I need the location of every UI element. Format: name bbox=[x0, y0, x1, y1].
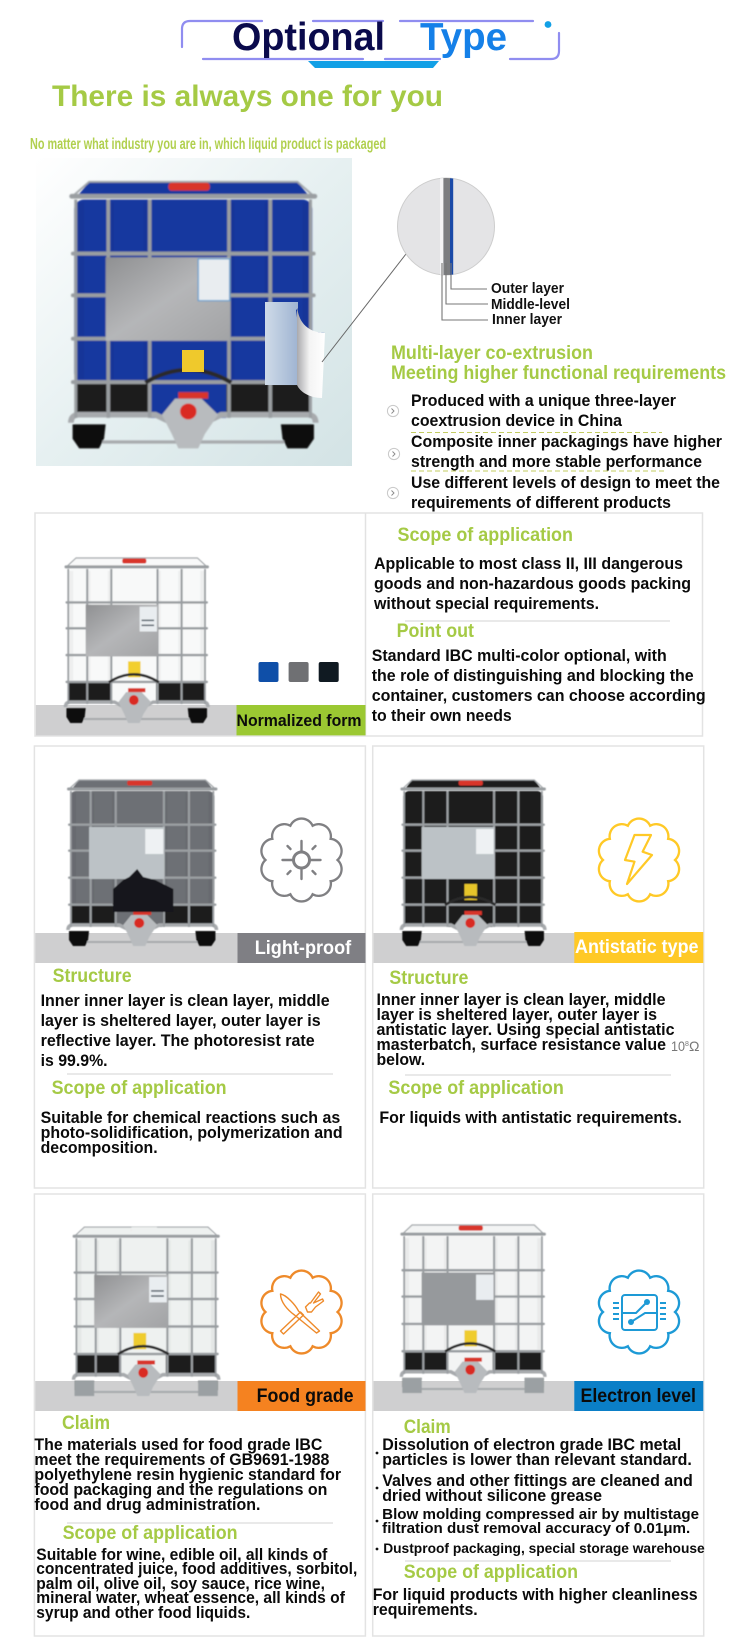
diagram: layer cross-section: Middle-level bbox=[491, 297, 570, 313]
colour swatches bbox=[258, 662, 339, 682]
title: Type bbox=[420, 16, 507, 59]
text: structure: layer is sheltered layer, outer layer is bbox=[41, 1012, 321, 1030]
product: electron grade IBC bbox=[400, 1225, 546, 1393]
text: scope of application bbox=[373, 525, 691, 613]
heading: multi-layer: Meeting higher functional requirements bbox=[391, 363, 726, 384]
title: Optional bbox=[232, 16, 385, 59]
text: claim list: particles is lower than relevant standard. bbox=[382, 1451, 692, 1469]
feature list: Use different levels of design to meet the bbox=[411, 474, 720, 492]
panel: normalized form bbox=[35, 513, 706, 736]
text: structure: antistatic layer. Using special antistatic bbox=[376, 1021, 674, 1039]
text: claim list: filtration dust removal accuracy of 0.01μm. bbox=[382, 1520, 690, 1537]
text: scope of application: Suitable for wine, edible oil, all kinds of bbox=[36, 1546, 328, 1564]
text: scope of application: mineral water, wheat essence, all kinds of bbox=[36, 1589, 345, 1607]
photo: blue IBC with peeled liner bbox=[36, 158, 406, 466]
feature list bbox=[387, 392, 723, 512]
text: claim: polyethylene resin hygienic standard for bbox=[34, 1466, 342, 1484]
label: food grade bbox=[238, 1381, 366, 1411]
text: point out: Point out bbox=[397, 621, 475, 642]
text: scope of application: Suitable for chemical reactions such as bbox=[41, 1109, 340, 1127]
subtitle: There is always one for you bbox=[52, 80, 443, 113]
feature list: Composite inner packagings have higher bbox=[411, 433, 723, 451]
text: structure: is 99.9%. bbox=[41, 1052, 108, 1070]
feature list: strength and more stable performance bbox=[411, 453, 702, 471]
text: scope of application: syrup and other food liquids. bbox=[36, 1604, 250, 1622]
intro line: No matter what industry you are in, which liquid product is packaged bbox=[30, 136, 386, 153]
text: scope of application bbox=[379, 1078, 682, 1127]
text: structure: Inner inner layer is clean layer, middle bbox=[41, 992, 330, 1010]
text: scope of application: photo-solidification, polymerization and bbox=[41, 1124, 343, 1142]
text: claim list: dried without silicone grease bbox=[382, 1487, 602, 1505]
heading: multi-layer: Multi-layer co-extrusion bbox=[391, 343, 593, 364]
text: scope of application: Applicable to most class II, III dangerous bbox=[374, 555, 683, 573]
label: antistatic type: Antistatic type bbox=[575, 937, 698, 958]
text: scope of application: Scope of application bbox=[398, 525, 573, 546]
product: grey IBC bbox=[67, 780, 217, 946]
label: light-proof bbox=[238, 933, 366, 963]
label: electron level bbox=[574, 1381, 703, 1411]
label: normalized form bbox=[236, 705, 366, 735]
text: scope of application: decomposition. bbox=[41, 1139, 158, 1157]
text: claim: The materials used for food grade IBC bbox=[34, 1436, 322, 1454]
text: scope of application: palm oil, olive oil, soy sauce, rice wine, bbox=[36, 1575, 325, 1593]
text: structure: below. bbox=[376, 1051, 425, 1069]
feature list: coextrusion device in China bbox=[411, 412, 623, 430]
text: structure: reflective layer. The photoresist rate bbox=[41, 1032, 315, 1050]
text: scope of application: concentrated juice, food additives, sorbitol, bbox=[36, 1560, 357, 1578]
text: structure bbox=[376, 968, 699, 1069]
text: structure: masterbatch, surface resistance value bbox=[376, 1036, 666, 1054]
text: claim: food and drug administration. bbox=[34, 1496, 260, 1514]
text: scope of application: without special requirements. bbox=[373, 595, 599, 613]
text: scope of application: Scope of application bbox=[404, 1562, 578, 1583]
text: point out: container, customers can choose according bbox=[372, 687, 706, 705]
diagram: layer cross-section: Outer layer bbox=[491, 281, 564, 297]
product: white IBC bbox=[64, 558, 209, 723]
text: scope of application: For liquid products with higher cleanliness bbox=[373, 1586, 698, 1604]
text: scope of application: goods and non-hazardous goods packing bbox=[374, 575, 691, 593]
label: normalized form: Normalized form bbox=[236, 711, 362, 730]
feature list: Produced with a unique three-layer bbox=[411, 392, 677, 410]
icon: lightning bolt bbox=[599, 819, 679, 901]
text: claim list: Dustproof packaging, special storage warehouse bbox=[383, 1540, 705, 1556]
label: electron level: Electron level bbox=[580, 1386, 696, 1407]
label: food grade: Food grade bbox=[257, 1386, 354, 1407]
text: structure: Structure bbox=[389, 968, 468, 989]
text: point out bbox=[372, 621, 706, 725]
panel: electron level bbox=[373, 1194, 705, 1636]
text: claim list: Claim bbox=[404, 1417, 451, 1438]
panel: food grade bbox=[34, 1194, 366, 1636]
text: claim: Claim bbox=[62, 1413, 110, 1434]
product: food grade IBC bbox=[73, 1227, 220, 1396]
panel: light-proof bbox=[34, 746, 366, 1188]
text: point out: the role of distinguishing and blocking the bbox=[372, 667, 694, 685]
text: scope of application bbox=[373, 1562, 698, 1619]
icon: sun bbox=[261, 819, 342, 901]
label: light-proof: Light-proof bbox=[255, 938, 352, 959]
diagram: layer cross-section bbox=[398, 178, 570, 328]
text: point out: Standard IBC multi-color optional, with bbox=[372, 647, 667, 665]
text: structure bbox=[41, 966, 330, 1070]
text: scope of application: Scope of application bbox=[388, 1078, 564, 1099]
text: structure: layer is sheltered layer, outer layer is bbox=[376, 1006, 657, 1024]
text: scope of application bbox=[36, 1523, 357, 1622]
text: claim list: Valves and other fittings are cleaned and bbox=[382, 1472, 693, 1490]
text: scope of application: requirements. bbox=[373, 1601, 478, 1619]
text: structure: 8 bbox=[685, 1041, 689, 1048]
text: claim: meet the requirements of GB9691-1988 bbox=[34, 1451, 329, 1469]
heading: multi-layer bbox=[391, 343, 726, 384]
text: structure: Structure bbox=[53, 966, 132, 987]
title bbox=[182, 16, 559, 68]
text: claim: food packaging and the regulations on bbox=[34, 1481, 327, 1499]
label: antistatic type bbox=[574, 932, 703, 963]
text: scope of application: Scope of application bbox=[52, 1078, 227, 1099]
text: structure: Inner inner layer is clean layer, middle bbox=[376, 991, 666, 1009]
icon: knife and fork bbox=[261, 1271, 342, 1353]
feature list: requirements of different products bbox=[411, 494, 671, 512]
diagram: layer cross-section: Inner layer bbox=[492, 312, 562, 328]
panel: antistatic type bbox=[373, 746, 704, 1188]
text: claim bbox=[34, 1413, 342, 1514]
text: claim list: Blow molding compressed air by multistage bbox=[382, 1506, 699, 1523]
text: claim list: Dissolution of electron grade IBC metal bbox=[382, 1436, 681, 1454]
text: claim list bbox=[376, 1417, 705, 1556]
product: black IBC bbox=[400, 780, 546, 946]
text: scope of application: For liquids with antistatic requirements. bbox=[379, 1109, 682, 1127]
icon: circuit chip bbox=[599, 1271, 679, 1353]
text: scope of application bbox=[41, 1078, 343, 1157]
text: structure: Ω bbox=[689, 1038, 699, 1054]
text: scope of application: Scope of application bbox=[63, 1523, 238, 1544]
text: structure: 10 bbox=[671, 1038, 685, 1054]
text: point out: to their own needs bbox=[372, 707, 512, 725]
